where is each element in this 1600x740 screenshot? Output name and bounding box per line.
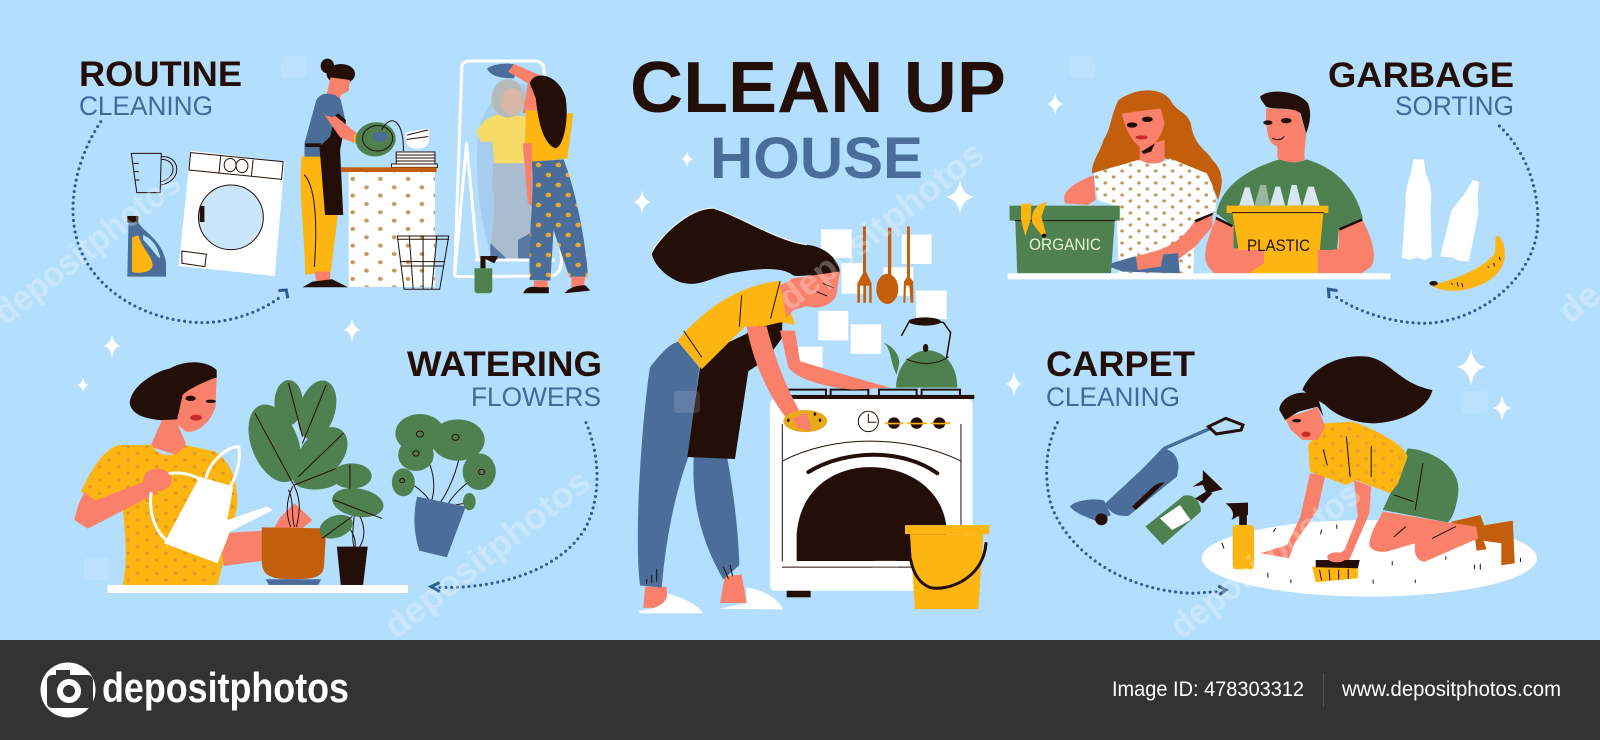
bin labels: ORGANIC bbox=[1029, 235, 1101, 254]
bucket bbox=[905, 525, 989, 609]
panel: routine cleaning bbox=[73, 55, 590, 323]
bin labels: PLASTIC bbox=[1247, 236, 1310, 255]
bin: organic bbox=[1010, 202, 1120, 273]
heading: garbage sorting: SORTING bbox=[1395, 91, 1514, 121]
illustration: routine cleaning bbox=[73, 59, 590, 323]
watermarks: depositphotos bbox=[1162, 472, 1368, 646]
woman washing dishes bbox=[301, 59, 376, 287]
icon: sponge bbox=[783, 410, 827, 432]
panel: carpet cleaning bbox=[1046, 345, 1537, 597]
small potted plant bbox=[314, 463, 387, 586]
icon: washing machine bbox=[179, 151, 285, 276]
watermarks: depositphotos bbox=[770, 132, 992, 318]
oven bbox=[770, 390, 974, 597]
illustration: carpet cleaning bbox=[1047, 356, 1537, 597]
woman at mirror bbox=[508, 64, 590, 293]
shelf bbox=[1008, 273, 1390, 279]
large potted plant bbox=[239, 377, 358, 585]
carpet bbox=[1202, 520, 1537, 597]
heading: routine cleaning bbox=[79, 55, 242, 121]
panel: watering flowers bbox=[74, 345, 602, 593]
title bbox=[630, 48, 1006, 191]
dotted arrow bbox=[1047, 423, 1226, 595]
dishes bbox=[348, 116, 437, 167]
icon: banana bbox=[1429, 235, 1505, 291]
shelf bbox=[108, 585, 408, 593]
woman scrubbing carpet bbox=[1260, 356, 1515, 567]
title: CLEAN UP bbox=[630, 48, 1006, 128]
icon: detergent bottle bbox=[127, 216, 166, 277]
woman cleaning bbox=[638, 208, 890, 613]
image id: Image ID: 478303312 bbox=[1112, 678, 1304, 701]
heading: watering flowers: WATERING bbox=[407, 345, 602, 384]
hanging pilea plant bbox=[392, 414, 496, 557]
woman with watering can bbox=[74, 362, 312, 585]
divider bbox=[1323, 673, 1324, 707]
icon: depositphotos logo bbox=[40, 662, 96, 718]
title: HOUSE bbox=[710, 126, 923, 191]
icon: vacuum cleaner bbox=[1070, 418, 1243, 525]
heading: garbage sorting: GARBAGE bbox=[1328, 56, 1514, 95]
bin labels bbox=[1029, 235, 1310, 255]
mirror with reflection bbox=[455, 61, 562, 277]
icon: spray bottle bbox=[474, 256, 497, 293]
dotted arrow bbox=[73, 122, 288, 323]
footer bar bbox=[0, 640, 1600, 740]
dotted arrow bbox=[431, 423, 597, 592]
heading: watering flowers: FLOWERS bbox=[471, 382, 601, 412]
dotted arrow bbox=[1328, 126, 1538, 323]
heading: watering flowers bbox=[407, 345, 602, 412]
website: www.depositphotos.com bbox=[1341, 678, 1561, 701]
icon: measuring cup bbox=[131, 153, 177, 193]
counter bbox=[341, 167, 437, 287]
watermarks: depositphotos bbox=[376, 460, 598, 646]
watermarks bbox=[0, 56, 1600, 646]
illustration: watering flowers bbox=[74, 362, 597, 593]
logo wordmark: depositphotos bbox=[102, 664, 349, 711]
icon: white bottles bbox=[1402, 159, 1479, 262]
heading: routine cleaning: CLEANING bbox=[79, 91, 213, 121]
heading: routine cleaning: ROUTINE bbox=[79, 55, 242, 94]
icon: wire basket bbox=[397, 236, 449, 289]
heading: garbage sorting bbox=[1328, 56, 1514, 121]
man sorting bbox=[1205, 92, 1374, 273]
icon: scrubbing brush bbox=[1312, 552, 1360, 582]
kettle bbox=[883, 317, 957, 388]
wall tiles bbox=[798, 229, 947, 367]
sparkles bbox=[77, 92, 1511, 421]
icon: spray bottle bbox=[1226, 503, 1254, 569]
panel: central woman cleaning oven bbox=[638, 208, 989, 613]
heading: carpet cleaning bbox=[1046, 345, 1195, 412]
illustration: garbage sorting bbox=[1008, 90, 1538, 323]
bin: plastic bbox=[1227, 185, 1341, 273]
heading: carpet cleaning: CLEANING bbox=[1046, 382, 1180, 412]
woman sorting bbox=[1064, 90, 1222, 273]
panel: garbage sorting bbox=[1008, 56, 1538, 323]
heading: carpet cleaning: CARPET bbox=[1046, 345, 1195, 384]
icon: green bottle bbox=[1145, 470, 1223, 545]
hanging utensils bbox=[857, 226, 913, 304]
